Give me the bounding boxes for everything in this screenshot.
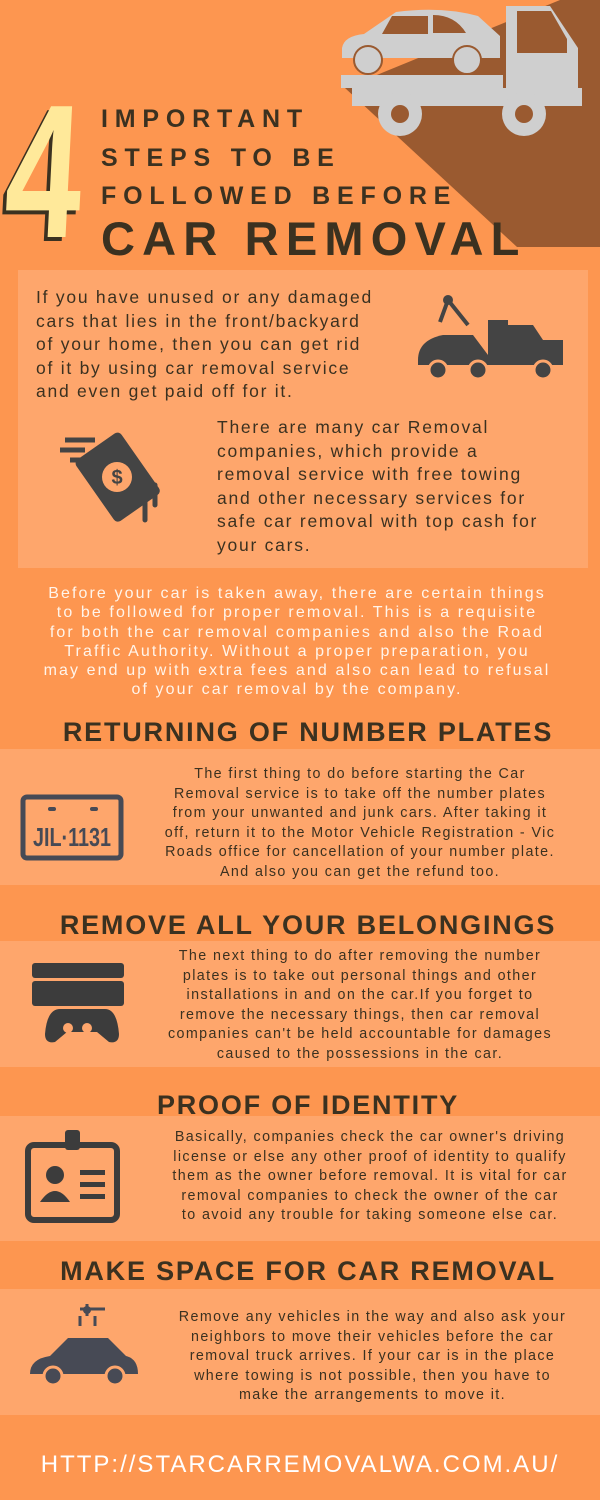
text: And also you can get the refund too. [220, 864, 500, 880]
text: before removal paragraph: Traffic Authority. Without a proper preparation, you [64, 643, 530, 660]
panel: identity [0, 1116, 600, 1241]
text: caused to the possessions in the car. [217, 1046, 503, 1062]
text: before removal paragraph: to be followed for proper removal. This is a requisite [57, 604, 537, 621]
text: before removal paragraph: Before your car is taken away, there are certain things [48, 585, 546, 602]
heading: remove all your belongings: REMOVE ALL YOUR BELONGINGS [60, 910, 556, 940]
text: Roads office for cancellation of your number plate. [165, 844, 555, 860]
text: license or else any other proof of identity to qualify [173, 1148, 567, 1164]
footer url: HTTP://STARCARREMOVALWA.COM.AU/ [41, 1451, 559, 1478]
text: before removal paragraph: may end up with extra fees and also can lead to refusal [44, 662, 550, 679]
heading: make space for car removal: MAKE SPACE FOR CAR REMOVAL [60, 1256, 556, 1286]
title: FOLLOWED BEFORE [101, 182, 457, 210]
panel: make space [0, 1289, 600, 1415]
text: to avoid any trouble for taking someone else car. [182, 1207, 558, 1223]
text [165, 766, 555, 880]
text: intro 2: safe car removal with top cash for [217, 511, 538, 531]
text: before removal paragraph: of your car removal by the company. [131, 681, 463, 698]
title: STEPS TO BE [101, 144, 341, 172]
title: IMPORTANT [101, 105, 309, 133]
text: intro 2: companies, which provide a [217, 440, 478, 460]
text: remove the necessary things, then car removal [180, 1006, 540, 1022]
text: intro 1 [36, 287, 373, 401]
text: intro 1: and even get paid off for it. [36, 381, 294, 401]
panel: intro [18, 270, 588, 568]
text: Remove any vehicles in the way and also ask your [179, 1309, 566, 1325]
panel: number plates [0, 749, 600, 885]
text: off, return it to the Motor Vehicle Registration - Vic [165, 824, 555, 840]
icon: car with crane hook [30, 1304, 138, 1384]
text [168, 948, 552, 1062]
text: them as the owner before removal. It is vital for car [172, 1168, 568, 1184]
text: Removal service is to take off the number plates [174, 786, 546, 802]
text: where towing is not possible, then you have to [194, 1368, 551, 1384]
icon: game console [32, 963, 124, 1042]
text: removal truck arrives. If your car is in the place [190, 1348, 555, 1364]
text: intro 2: There are many car Removal [217, 417, 489, 437]
title [101, 105, 527, 264]
icon: money: $ [111, 467, 123, 489]
text: intro 1: cars that lies in the front/backyard [36, 310, 361, 330]
title: CAR REMOVAL [101, 212, 527, 264]
heading: returning of number plates: RETURNING OF NUMBER PLATES [63, 717, 553, 747]
text [179, 1309, 566, 1403]
text: The next thing to do after removing the number [179, 948, 541, 964]
text: intro 2: removal service with free towing [217, 464, 522, 484]
big number 4: 4 [1, 66, 87, 278]
text: before removal paragraph [44, 585, 550, 698]
icon: money [60, 432, 160, 522]
text: Basically, companies check the car owner's driving [175, 1129, 565, 1145]
text [172, 1129, 568, 1223]
text: installations in and on the car.If you forget to [187, 987, 533, 1003]
text: removal companies to check the owner of the car [181, 1188, 559, 1204]
text: intro 1: of your home, then you can get rid [36, 334, 361, 354]
text: before removal paragraph: for both the car removal companies and also the Road [50, 624, 544, 641]
text: The first thing to do before starting the Car [194, 766, 526, 782]
icon: tow truck small [418, 295, 563, 378]
icon: tow truck with shadow [341, 0, 600, 247]
icon: ID card [25, 1130, 120, 1223]
heading: proof of identity: PROOF OF IDENTITY [157, 1090, 459, 1120]
text: companies can't be held accountable for damages [168, 1026, 552, 1042]
text: intro 1: If you have unused or any damaged [36, 287, 373, 307]
panel: belongings [0, 941, 600, 1067]
text: make the arrangements to move it. [239, 1387, 506, 1403]
text: intro 1: of it by using car removal service [36, 358, 350, 378]
text: intro 2: and other necessary services for [217, 488, 526, 508]
text: from your unwanted and junk cars. After taking it [173, 805, 547, 821]
text: intro 2: your cars. [217, 534, 311, 554]
text: plates is to take out personal things and other [183, 968, 537, 984]
icon: number plate [20, 794, 124, 860]
text: intro 2 [217, 417, 538, 554]
text: neighbors to move their vehicles before the car [191, 1328, 554, 1344]
